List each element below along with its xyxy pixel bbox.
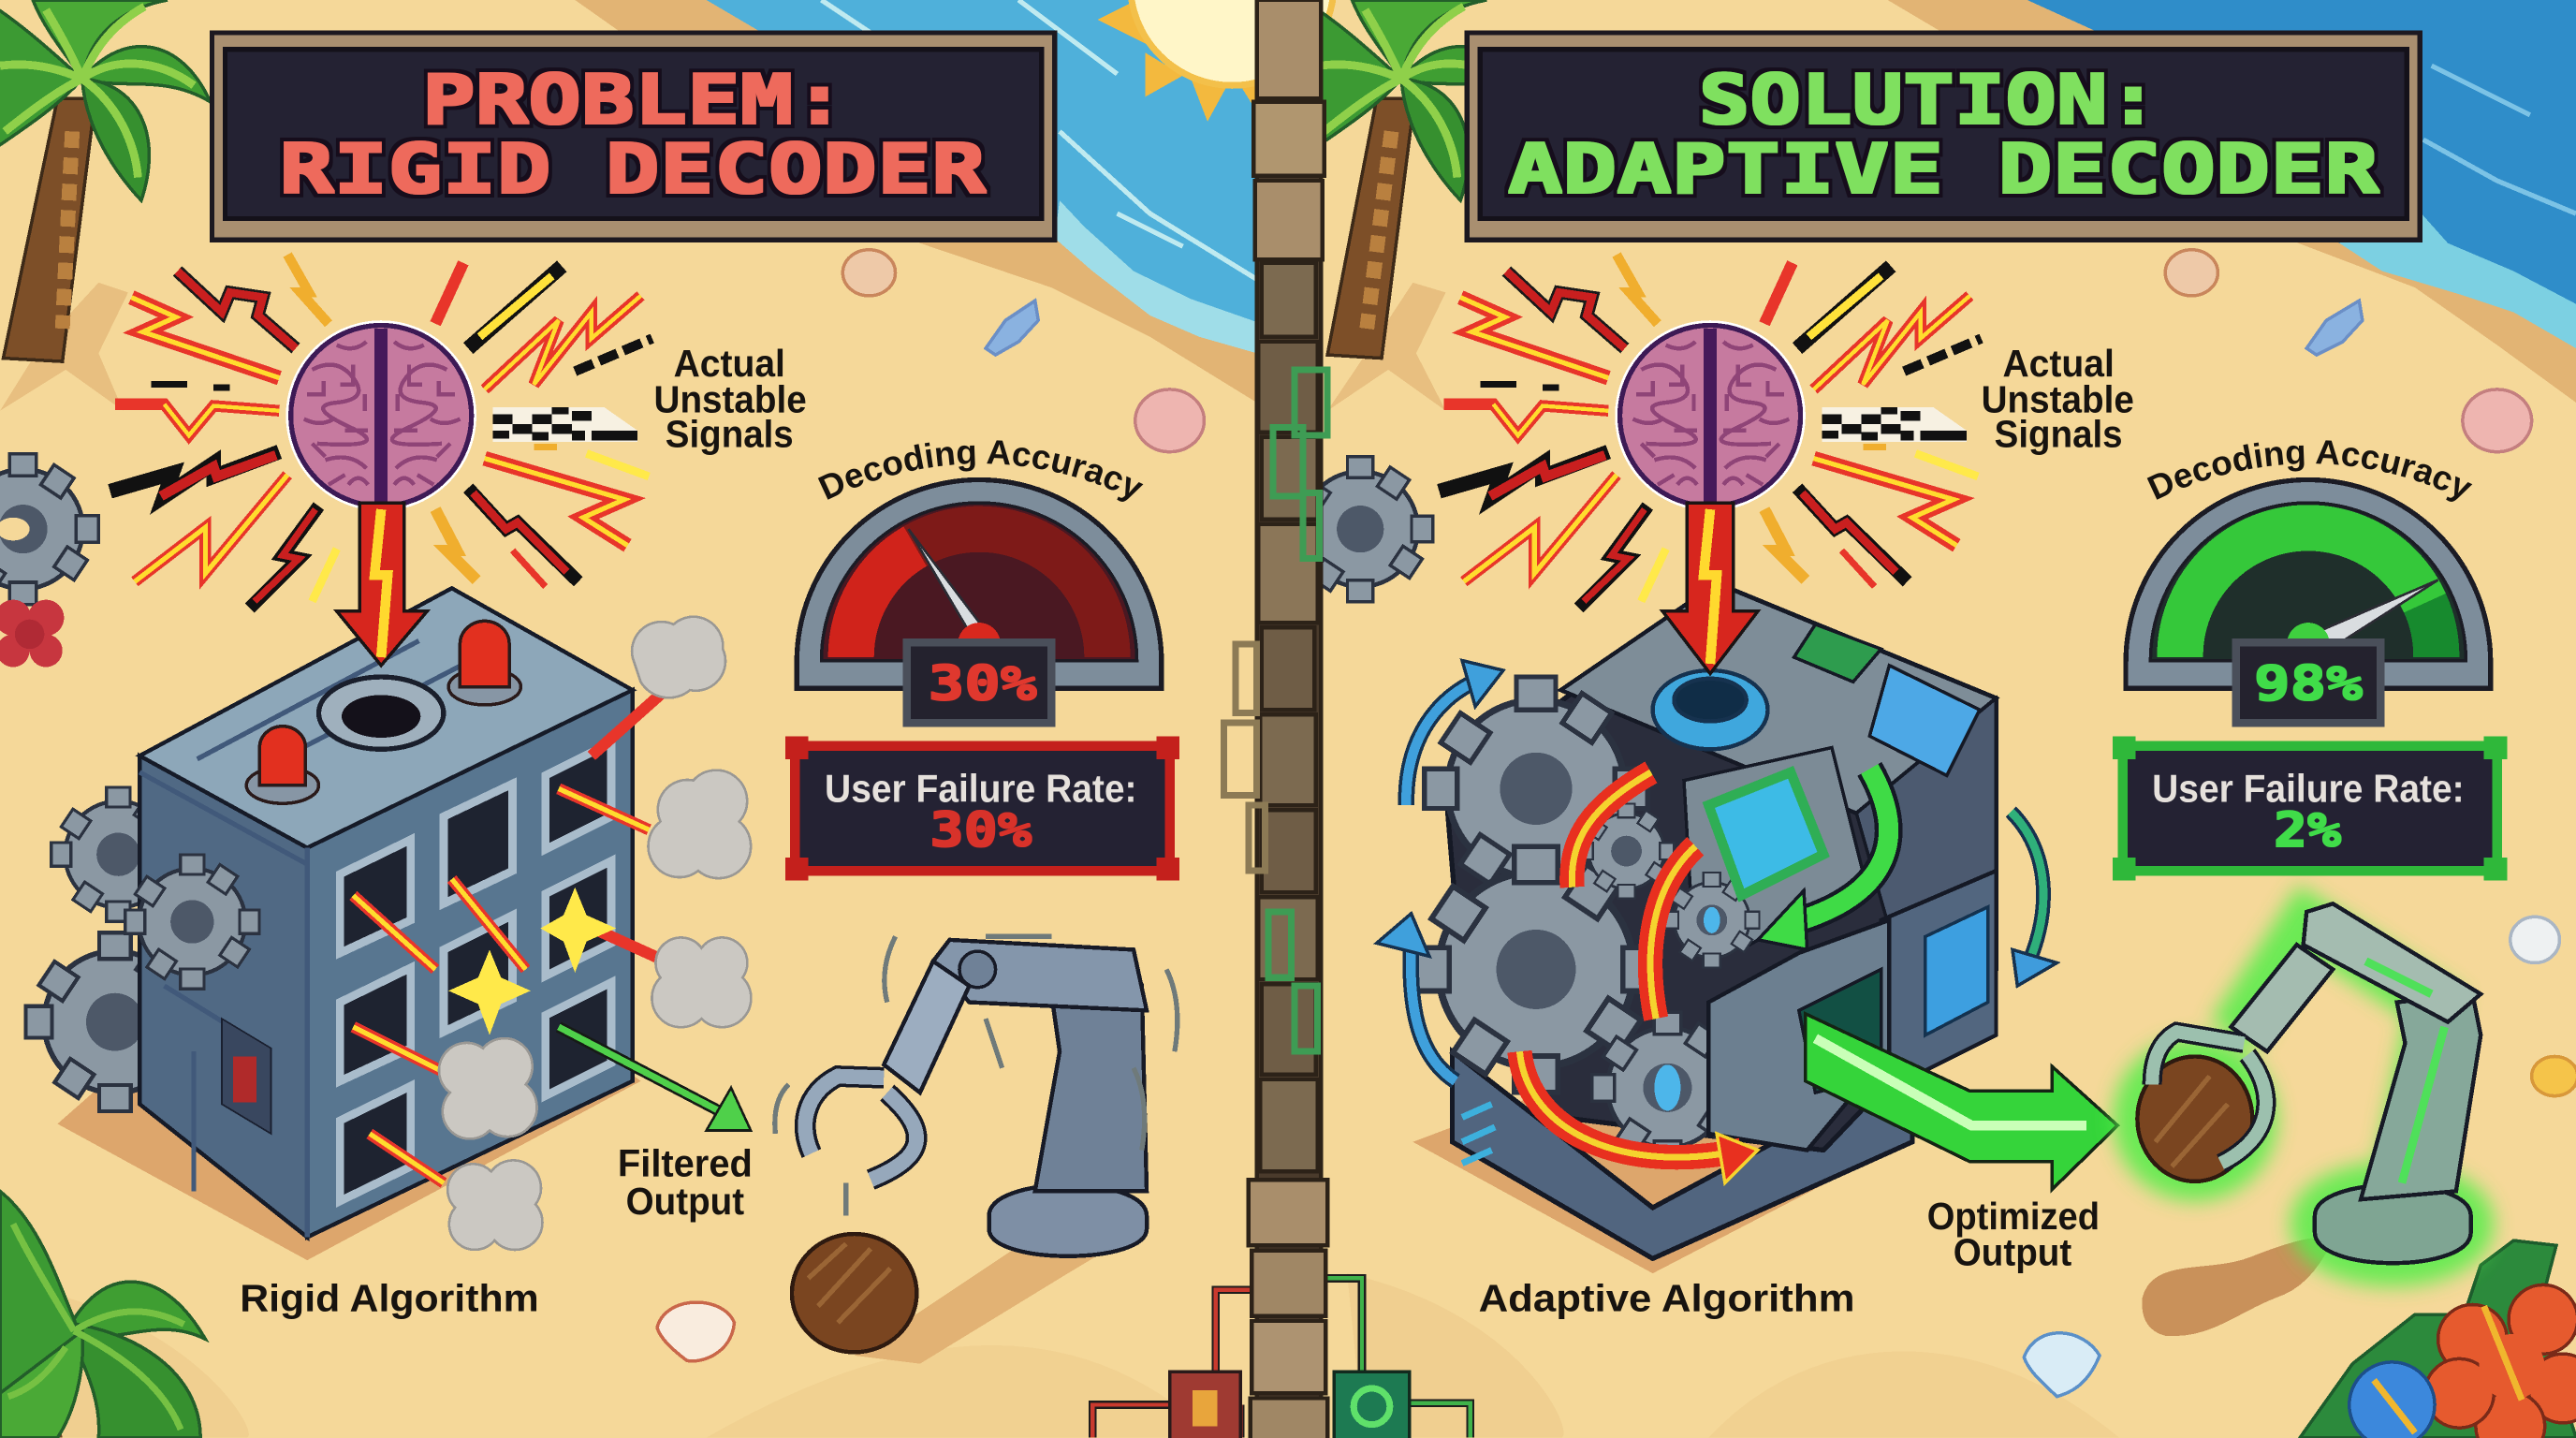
label: rigid algorithm: Rigid Algorithm	[240, 1277, 539, 1320]
panel: left user failure rate	[785, 736, 1179, 881]
green robot base	[2315, 1185, 2471, 1263]
left signal bursts	[110, 255, 652, 608]
failure rate label: User Failure Rate:	[2152, 766, 2465, 810]
green robot upper arm	[2304, 903, 2481, 1022]
coconut	[792, 1234, 916, 1352]
left signal arrow	[337, 503, 427, 666]
sand shadows and footprints	[0, 283, 2119, 1438]
gauge hub	[958, 623, 1001, 644]
windows	[340, 742, 611, 1201]
blue data screen	[1925, 907, 1988, 1035]
palm tree bottom left	[0, 1191, 205, 1438]
green robot gripper	[2152, 1032, 2266, 1164]
seashells	[657, 250, 2576, 1397]
adaptive decoder machine	[1413, 583, 1996, 1258]
panel: solution sign	[1467, 33, 2420, 240]
label: actual unstable signals right	[1982, 342, 2134, 455]
title: problem line 1: PROBLEM:	[422, 61, 846, 139]
green module top	[1794, 624, 1881, 682]
label: optimized output	[1927, 1195, 2100, 1273]
blue top port	[1653, 670, 1767, 749]
gauge value	[2236, 642, 2380, 723]
gauge value: 98%	[2254, 657, 2363, 712]
label: actual unstable signals right: Actual	[2002, 342, 2115, 385]
failure rate label: User Failure Rate:	[825, 766, 1137, 810]
gauge housing	[797, 479, 1162, 688]
green curved internal arrow	[1758, 769, 1889, 949]
gauge scale	[2180, 528, 2425, 657]
green robot forearm	[2231, 945, 2333, 1051]
red yellow signal flows	[1519, 772, 1758, 1183]
panel: problem sign	[212, 33, 1055, 240]
top plate	[1560, 583, 1996, 814]
status panel	[222, 1019, 271, 1134]
blue screen top	[1869, 666, 1980, 775]
gauge value	[907, 642, 1051, 723]
robot arm failing, dropped coconut	[775, 936, 1178, 1364]
gauge: right decoding accuracy 98%	[2123, 440, 2494, 726]
gauge face	[2150, 503, 2466, 661]
smoke puffs	[439, 617, 751, 1250]
motion lines	[775, 936, 1178, 1216]
robot column	[1035, 986, 1147, 1191]
red connector	[1170, 1372, 1240, 1438]
riveted seams	[139, 640, 493, 1238]
green filtered output arrow	[559, 1027, 751, 1130]
left ocean	[575, 0, 1257, 403]
label: actual unstable signals left: Actual	[674, 342, 785, 385]
panel: right user failure rate	[2113, 736, 2507, 881]
rigid decoder machine	[25, 588, 751, 1250]
machine base	[1453, 1051, 1912, 1258]
machine core	[1445, 583, 1996, 1151]
green robot column	[2361, 994, 2481, 1199]
label: filtered output: Output	[626, 1180, 744, 1223]
robot base	[989, 1185, 1147, 1256]
palm tree top left	[0, 0, 211, 361]
gauge housing	[2126, 479, 2491, 688]
gauge value: 30%	[929, 657, 1037, 712]
arm ground shadow	[2142, 1238, 2333, 1336]
open gripper	[805, 1077, 916, 1180]
red alarm lights	[246, 621, 520, 803]
green glow	[2139, 922, 2467, 1260]
sparks	[353, 690, 666, 1183]
right machine ground shadow	[1412, 1051, 1906, 1273]
right brain	[1615, 320, 1806, 511]
sun	[1097, 0, 1334, 122]
input port	[318, 677, 444, 749]
gauge scale	[851, 547, 915, 657]
arm shadow	[855, 1224, 1150, 1364]
back gears	[25, 787, 204, 1111]
tropical flowers bottom right	[2300, 1240, 2576, 1438]
gauge face	[822, 503, 1137, 661]
failure rate value: 30%	[929, 803, 1032, 858]
label: filtered output: Filtered	[618, 1142, 753, 1185]
blue rotation arrows	[1377, 661, 2056, 1081]
label: actual unstable signals left	[654, 342, 807, 455]
label: optimized output: Output	[1954, 1230, 2071, 1273]
chains on divider	[1224, 370, 1327, 1051]
right module with screen	[1881, 871, 1996, 1077]
left machine ground shadow	[57, 1019, 640, 1260]
gauge needle	[2320, 580, 2438, 647]
gauge hub	[2287, 623, 2330, 644]
robot forearm	[884, 961, 970, 1093]
palm tree top right	[1303, 0, 1530, 359]
label: actual unstable signals left: Unstable	[654, 378, 807, 421]
machine body	[139, 588, 633, 1238]
robot upper arm	[933, 940, 1147, 1010]
label: actual unstable signals right: Unstable	[1982, 378, 2134, 421]
right ocean	[1888, 0, 2576, 403]
label: optimized output: Optimized	[1927, 1195, 2100, 1238]
label: filtered output	[618, 1142, 753, 1223]
base vents	[1462, 1104, 1495, 1164]
background gears and flower	[0, 454, 1433, 668]
green connector	[1334, 1372, 1410, 1438]
stone divider column	[1249, 0, 1327, 1438]
blue and green cell	[1708, 772, 1823, 895]
bottom wires and connector boxes	[1092, 1278, 1471, 1438]
right signal bursts	[1439, 255, 1982, 608]
right signal arrow	[1662, 503, 1758, 674]
failure rate value: 2%	[2274, 803, 2341, 858]
gauge needle	[909, 529, 986, 638]
gray housing	[1684, 748, 1865, 945]
front gear	[125, 855, 259, 989]
dark upper right housing	[1856, 698, 1996, 929]
title: solution line 1: SOLUTION:	[1699, 61, 2159, 139]
gauge title: Decoding Accuracy	[2147, 440, 2473, 502]
label: adaptive algorithm: Adaptive Algorithm	[1479, 1277, 1855, 1320]
green glowing robot arm holding coconut	[2137, 903, 2481, 1336]
label: actual unstable signals left: Signals	[666, 412, 794, 455]
coconut held	[2137, 1056, 2252, 1181]
label: actual unstable signals right: Signals	[1995, 412, 2123, 455]
title: solution line 2: ADAPTIVE DECODER	[1508, 129, 2379, 208]
title: problem line 2: RIGID DECODER	[279, 129, 987, 208]
gauge title: Decoding Accuracy	[818, 440, 1144, 502]
left brain	[285, 320, 476, 511]
gauge: left decoding accuracy 30%	[794, 440, 1164, 726]
gears	[1413, 677, 1760, 1163]
big green optimized output arrow	[1806, 1014, 2117, 1190]
output bay	[1708, 920, 1889, 1151]
